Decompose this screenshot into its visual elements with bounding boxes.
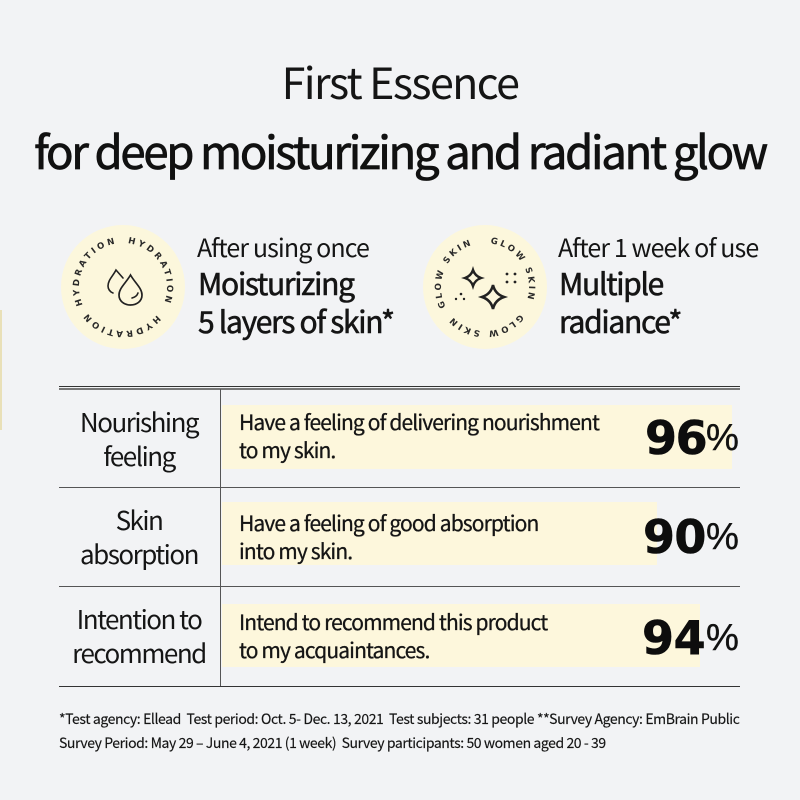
value: 96 percent: 96	[645, 411, 706, 465]
heading: moisturizing 5 layers	[198, 260, 394, 342]
row text: recommend: to my acquaintances.	[239, 635, 429, 665]
heading: multiple radiance: Multiple	[559, 260, 663, 304]
footnote line 1: *Test agency: Ellead Test period: Oct. 5- Dec. 13, 2021 Test subjects: 31 people **Survey Agency: EmBrain Public	[59, 709, 739, 729]
row text: recommend: Intend to recommend this product	[239, 607, 547, 637]
heading: multiple radiance: radiance*	[559, 298, 681, 342]
heading: moisturizing 5 layers: Moisturizing	[198, 260, 354, 304]
row label: nourishing feeling	[80, 403, 200, 474]
row text: absorption: Have a feeling of good absorption	[239, 508, 538, 538]
footnote	[59, 709, 740, 753]
value: 96 percent	[645, 411, 739, 465]
footnote line 2: Survey Period: May 29 – June 4, 2021 (1 week) Survey participants: 50 women aged 20 - 39	[59, 733, 606, 753]
icon: hydration badge: HYDRATION	[72, 238, 114, 306]
icon: glow skin badge: GLOW SKIN	[491, 238, 536, 300]
value: 90 percent: %	[706, 516, 739, 557]
bar: row 3	[222, 604, 700, 667]
heading: moisturizing 5 layers: 5 layers of skin*	[198, 298, 394, 342]
icon: hydration badge: HYDRATION	[128, 237, 174, 303]
row text: nourishment	[239, 407, 600, 465]
row label: intention to recommend: recommend	[72, 634, 206, 671]
bar: row 2	[222, 502, 657, 565]
row label: nourishing feeling: feeling	[103, 437, 175, 474]
heading: after 1 week: After 1 week of use	[558, 229, 758, 265]
value: 90 percent: 90	[643, 510, 706, 564]
row text: nourishment: to my skin.	[239, 435, 335, 465]
value: 96 percent: %	[706, 417, 739, 458]
row label: intention to recommend	[72, 600, 206, 671]
row text: absorption	[239, 508, 538, 566]
row label: intention to recommend: Intention to	[77, 600, 201, 637]
icon: glow skin badge: GLOW SKIN	[450, 316, 523, 338]
bar: row 1	[222, 405, 732, 469]
icon: hydration badge: HYDRATION	[84, 314, 161, 338]
title line 1: First Essence	[282, 50, 518, 112]
row label: skin absorption: Skin	[116, 501, 162, 538]
value: 90 percent	[643, 510, 739, 564]
value: 94 percent: %	[706, 617, 739, 658]
icon: hydration badge	[61, 225, 185, 349]
row label: skin absorption: absorption	[80, 535, 198, 572]
left edge tint	[0, 310, 2, 430]
row label: skin absorption	[80, 501, 198, 572]
value: 94 percent	[642, 611, 739, 665]
row text: absorption: into my skin.	[239, 536, 352, 566]
heading: multiple radiance	[559, 260, 681, 342]
row text: nourishment: Have a feeling of delivering nourishment	[239, 407, 599, 437]
row text: recommend	[239, 607, 548, 665]
row label: nourishing feeling: Nourishing	[80, 403, 198, 440]
heading: after using once: After using once	[197, 229, 369, 265]
value: 94 percent: 94	[642, 611, 705, 665]
icon: glow skin badge	[423, 225, 547, 349]
icon: glow skin badge: GLOW SKIN	[434, 240, 470, 308]
title line 2: for deep moisturizing and radiant glow	[34, 117, 766, 183]
